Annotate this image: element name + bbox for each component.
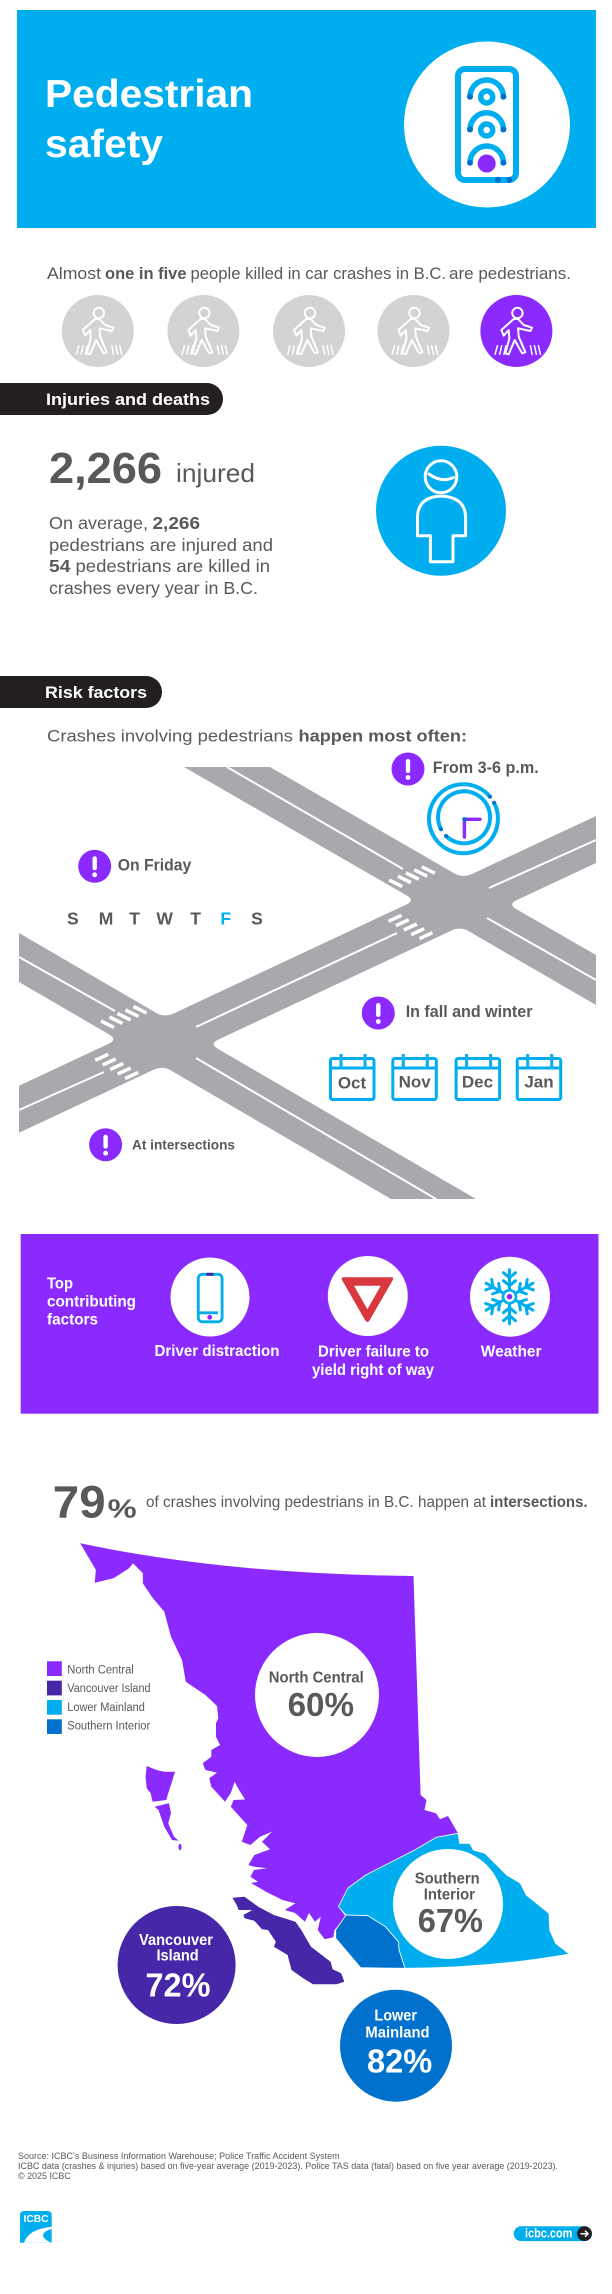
legend: Vancouver Island	[67, 1683, 151, 1695]
stat: 2,266 injured: 2,266	[49, 444, 162, 493]
text block: happen most often: happen most often:	[298, 727, 467, 746]
stat: 2,266 injured: injured	[176, 458, 255, 488]
label: driver distraction: Driver distraction	[154, 1343, 280, 1360]
region: cyan southern area	[338, 1833, 569, 1968]
callout: north central 60%: 60%	[288, 1686, 354, 1723]
icon: phone	[170, 1258, 250, 1336]
weekday row: W	[156, 908, 173, 928]
source notes	[18, 2151, 558, 2182]
text block: average injuries and deaths: pedestrians are killed in	[76, 556, 270, 576]
heading: injuries and deaths	[0, 383, 223, 415]
panel: top contributing factors	[21, 1234, 598, 1414]
icon: traffic light	[404, 42, 570, 208]
map: British Columbia regions	[80, 1543, 569, 1984]
callout: from 3-6 pm: From 3-6 p.m.	[433, 759, 539, 777]
stat: 2,266 injured	[49, 444, 255, 493]
region: vancouver island	[232, 1897, 344, 1984]
callout: from 3-6 pm	[392, 752, 539, 786]
callout: vancouver island 72%	[118, 1906, 236, 2024]
label: driver failure to yield	[312, 1344, 434, 1379]
callout: lower mainland 82%: 82%	[367, 2043, 432, 2080]
callout: on Friday: On Friday	[118, 857, 192, 875]
icon: person	[376, 446, 506, 576]
weekday row: T	[190, 908, 201, 928]
weekday row: T	[129, 908, 140, 928]
icons: five pedestrians	[62, 295, 552, 367]
stat: 79 percent at intersections: intersections.	[490, 1494, 588, 1511]
stat: 79 percent at intersections: of crashes involving pedestrians in B.C. happen at	[146, 1494, 487, 1511]
icon: clock	[429, 784, 498, 853]
text block: one in five: one in five	[105, 264, 186, 283]
text block: one in five: people killed in car crashes in B.C.	[190, 264, 446, 283]
callout: in fall and winter: In fall and winter	[406, 1003, 533, 1021]
panel: header banner	[17, 10, 596, 228]
text block: average injuries and deaths: 2,266	[152, 513, 200, 533]
callout: at intersections: At intersections	[132, 1136, 235, 1152]
icons: month calendars: Dec	[462, 1072, 493, 1091]
callout: north central 60%	[255, 1633, 379, 1757]
label: driver failure to yield: yield right of way	[312, 1362, 434, 1379]
stat: 79 percent at intersections: %	[108, 1493, 137, 1523]
title: Pedestrian	[45, 73, 253, 116]
label: weather: Weather	[481, 1344, 542, 1361]
text block: happen most often	[47, 727, 467, 746]
weekday row: S	[251, 908, 263, 928]
title	[45, 73, 253, 166]
title: safety	[45, 123, 163, 166]
callout: lower mainland 82%: Lower	[374, 2008, 417, 2025]
callout: on Friday	[78, 850, 192, 883]
callout: at intersections	[89, 1128, 235, 1161]
text block: one in five: Almost	[47, 264, 101, 283]
icon: yield sign	[328, 1256, 408, 1336]
heading: top contributing factors: factors	[47, 1311, 98, 1328]
weekday row: S	[67, 908, 79, 928]
heading: top contributing factors	[47, 1275, 136, 1328]
callout: in fall and winter	[362, 996, 533, 1030]
icons: month calendars: Jan	[524, 1072, 554, 1091]
text block: average injuries and deaths: On average,	[49, 513, 148, 533]
stat: 79 percent at intersections	[53, 1476, 588, 1527]
icons: month calendars: Nov	[399, 1072, 431, 1091]
text block: one in five	[47, 264, 571, 283]
weekday row: F	[220, 908, 231, 928]
callout: lower mainland 82%: Mainland	[365, 2024, 430, 2041]
legend: Lower Mainland	[67, 1702, 145, 1714]
text block: one in five: are pedestrians.	[449, 264, 571, 283]
weekday row: M	[99, 908, 113, 928]
legend: Southern Interior	[67, 1721, 150, 1733]
text block: average injuries and deaths: crashes every year in B.C.	[49, 578, 258, 598]
illustration: road intersections	[19, 767, 596, 1199]
callout: lower mainland 82%	[340, 1990, 452, 2102]
heading: risk factors: Risk factors	[45, 683, 147, 702]
label: driver failure to yield: Driver failure to	[318, 1344, 429, 1361]
weekday row	[67, 908, 263, 928]
heading: injuries and deaths: Injuries and deaths	[46, 390, 210, 409]
text block: average injuries and deaths	[49, 513, 273, 598]
legend: North Central	[67, 1664, 134, 1676]
region: north central	[80, 1543, 458, 1939]
heading: top contributing factors: contributing	[47, 1294, 136, 1311]
source notes: ICBC data (crashes & injuries) based on five-year average (2019-2023). Police TAS data (fatal) based on five year average (2019-2023).	[18, 2161, 558, 2172]
callout: southern interior 67%: Southern	[415, 1870, 480, 1887]
icons: month calendars	[330, 1054, 561, 1100]
icons: month calendars: Oct	[338, 1073, 367, 1092]
logo: ICBC	[20, 2211, 52, 2243]
link badge: icbc.com: icbc.com	[525, 2226, 572, 2240]
heading: top contributing factors: Top	[47, 1275, 73, 1292]
callout: southern interior 67%	[393, 1849, 503, 1959]
callout: vancouver island 72%: 72%	[146, 1967, 210, 2004]
callout: southern interior 67%: 67%	[418, 1902, 483, 1939]
text block: average injuries and deaths: 54	[49, 556, 71, 576]
text block: happen most often: Crashes involving pedestrians	[47, 727, 293, 746]
stat: 79 percent at intersections: 79	[53, 1476, 106, 1527]
callout: vancouver island 72%: Island	[156, 1948, 199, 1965]
callout: vancouver island 72%: Vancouver	[139, 1932, 213, 1949]
region: dark blue southwest area	[336, 1915, 405, 1968]
icon: snowflake	[470, 1257, 550, 1337]
legend	[47, 1661, 151, 1734]
source notes: © 2025 ICBC	[18, 2171, 71, 2182]
logo: ICBC: ICBC	[24, 2213, 49, 2225]
link badge: icbc.com	[514, 2226, 592, 2241]
heading: risk factors	[0, 676, 162, 708]
callout: north central 60%: North Central	[269, 1670, 364, 1687]
callout: southern interior 67%: Interior	[424, 1886, 475, 1903]
source notes: Source: ICBC’s Business Information Warehouse; Police Traffic Accident System	[18, 2151, 340, 2162]
text block: average injuries and deaths: pedestrians are injured and	[49, 535, 273, 555]
